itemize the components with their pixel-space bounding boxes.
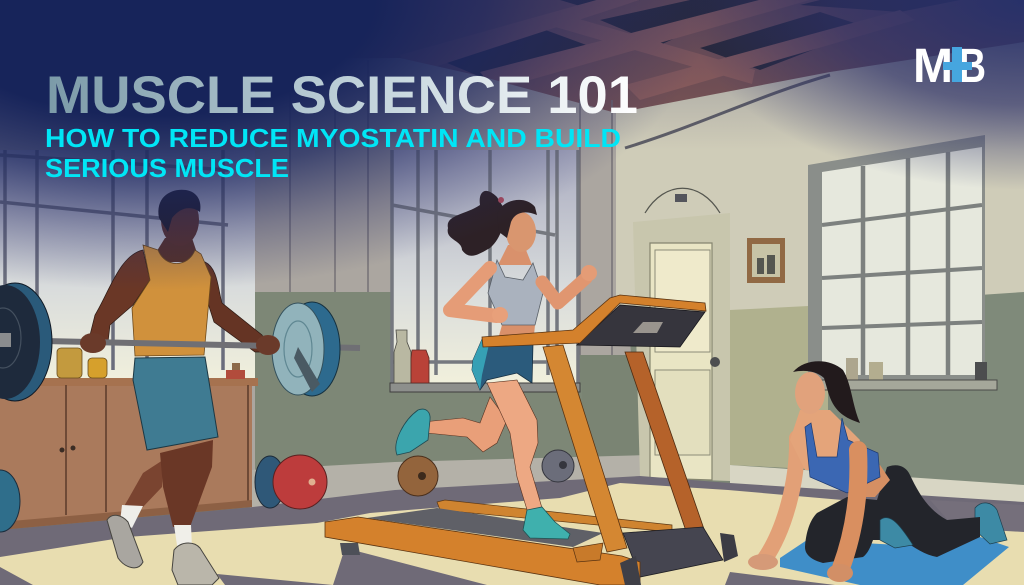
treadmill frame (325, 295, 738, 585)
leggings (805, 465, 980, 563)
neck and chest (790, 410, 860, 470)
logo: M+B: B (959, 40, 986, 93)
window sill items (846, 358, 987, 382)
shorts (472, 337, 533, 390)
hands (80, 333, 280, 355)
window sill (390, 383, 580, 392)
treadmill deck (340, 500, 672, 555)
back upright (625, 352, 705, 534)
ponytail (448, 191, 505, 256)
door (633, 188, 730, 481)
shorts stripe (472, 337, 490, 390)
midriff (497, 325, 535, 345)
jars (57, 348, 245, 379)
back leg (107, 460, 163, 568)
hair (793, 361, 860, 423)
man lifting barbell (0, 190, 360, 585)
corner cap (620, 556, 641, 585)
console (577, 305, 705, 347)
handle (482, 295, 706, 347)
picture frame (747, 238, 785, 283)
floor (0, 476, 1024, 585)
bracket (573, 543, 603, 562)
bottles on sill (394, 330, 429, 383)
yoga mat (780, 537, 1009, 585)
midriff (845, 465, 890, 497)
front rail (325, 517, 640, 585)
orange tank top (132, 245, 211, 356)
red plate (273, 455, 327, 509)
wooden cabinet (0, 348, 258, 530)
back leg (423, 397, 507, 452)
gray plate (542, 450, 574, 482)
right plate (272, 302, 340, 396)
front leg (487, 380, 542, 513)
head (795, 372, 825, 414)
shorts (133, 357, 218, 450)
arms (450, 265, 597, 323)
blue plate at left edge (0, 470, 20, 532)
subtitle: SERIOUS MUSCLE (45, 153, 289, 183)
front upright (543, 345, 627, 552)
dark navy gradient overlay (0, 0, 1024, 300)
subtitle: HOW TO REDUCE MYOSTATIN AND BUILD (45, 123, 621, 153)
near arm (841, 450, 858, 568)
back rail (437, 500, 672, 532)
woman stretching on mat (748, 361, 1009, 585)
hands (748, 554, 853, 582)
front leg (160, 440, 219, 585)
console screen (633, 322, 663, 333)
right arm (205, 262, 270, 352)
neck (150, 238, 200, 262)
feet (340, 543, 360, 555)
center window (390, 150, 580, 392)
wooden plate (398, 456, 438, 496)
title: MUSCLE SCIENCE 101 (46, 66, 638, 125)
end cap (720, 533, 738, 562)
subtitle (45, 123, 621, 183)
back shoe (975, 503, 1007, 544)
logo: M+B: M (913, 40, 953, 93)
left plate (0, 283, 52, 401)
gray tank top (488, 260, 543, 325)
far arm (764, 438, 797, 560)
left arm (90, 250, 150, 345)
blue sports top (805, 418, 880, 493)
back shoe (396, 409, 430, 455)
right window (808, 135, 997, 390)
blue plate (255, 456, 285, 508)
neck (498, 245, 532, 265)
floor weight plates (0, 450, 574, 532)
logo: M+B (913, 40, 986, 93)
front shoe (880, 518, 913, 548)
woman running (396, 191, 597, 539)
ceiling (0, 0, 1024, 170)
left window (0, 150, 255, 382)
barbell (0, 283, 360, 401)
front shoe (523, 507, 570, 539)
head (497, 197, 537, 252)
head (158, 190, 200, 246)
bar (0, 340, 360, 348)
motor housing (623, 527, 723, 577)
running belt (367, 508, 603, 547)
